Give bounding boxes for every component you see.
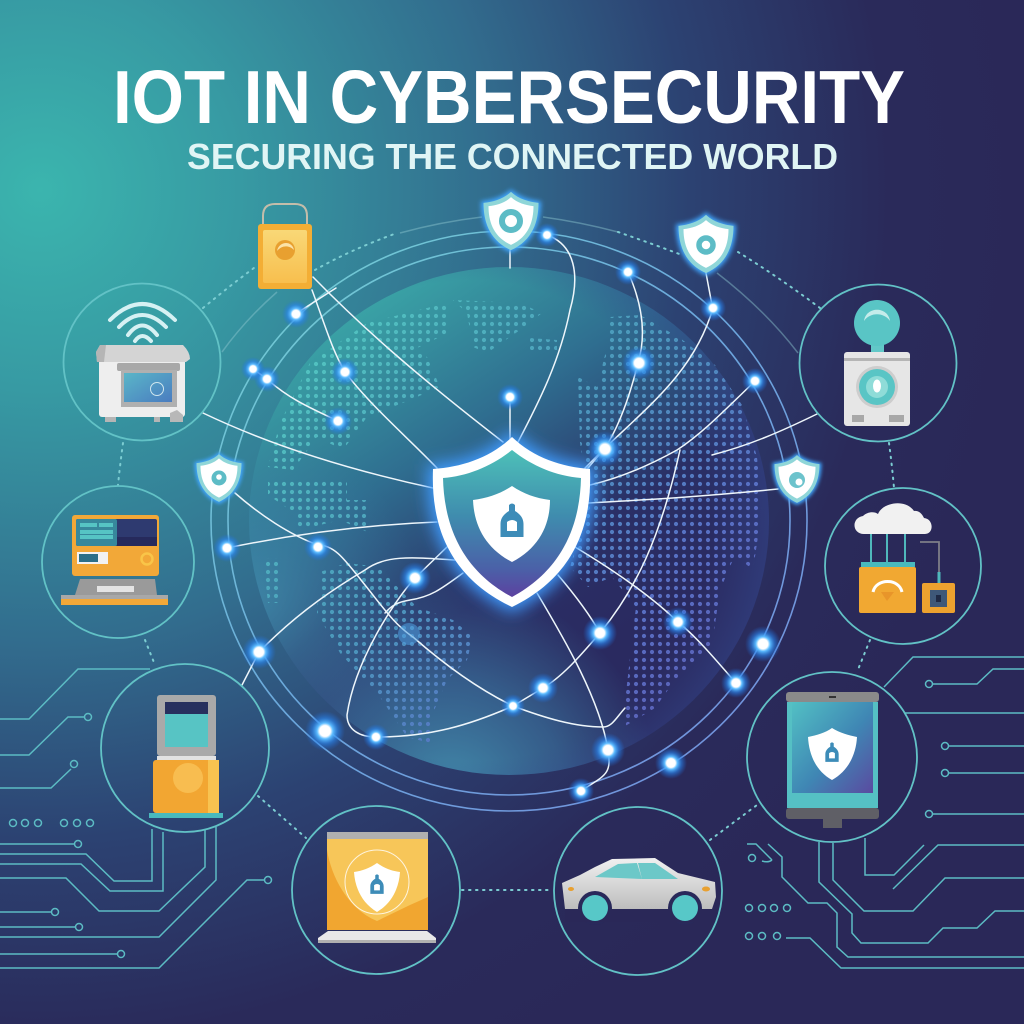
device circle: kiosk [101,664,269,832]
device circle: car [554,807,722,975]
icon: wifi arcs [110,304,175,341]
device circle: payment terminal [42,486,194,638]
globe [240,260,780,780]
shield: left [194,452,244,504]
circuit traces: right [746,657,1024,968]
device circle: smart washer with bulb [800,284,956,442]
dotted world map [266,300,758,742]
shield: top [481,189,541,253]
subtitle: SECURING THE CONNECTED WORLD [187,136,838,177]
icon: microwave [96,345,190,422]
dotted connectors [118,232,894,890]
central shield [433,437,590,607]
icon: yellow padlock [258,204,312,289]
device circle: laptop [292,806,460,974]
network lines [203,235,817,791]
shield: top right [676,212,736,276]
shield: right [772,453,822,505]
glowing network nodes [213,223,781,804]
device circle: microwave with wifi [64,284,220,440]
circuit traces: left [0,669,272,968]
orbit rings [211,231,807,811]
device circle: tablet [747,672,917,842]
device circle: cloud gateway [825,488,981,644]
faint outer arcs [222,217,798,353]
title: IOT IN CYBERSECURITY [113,55,905,139]
